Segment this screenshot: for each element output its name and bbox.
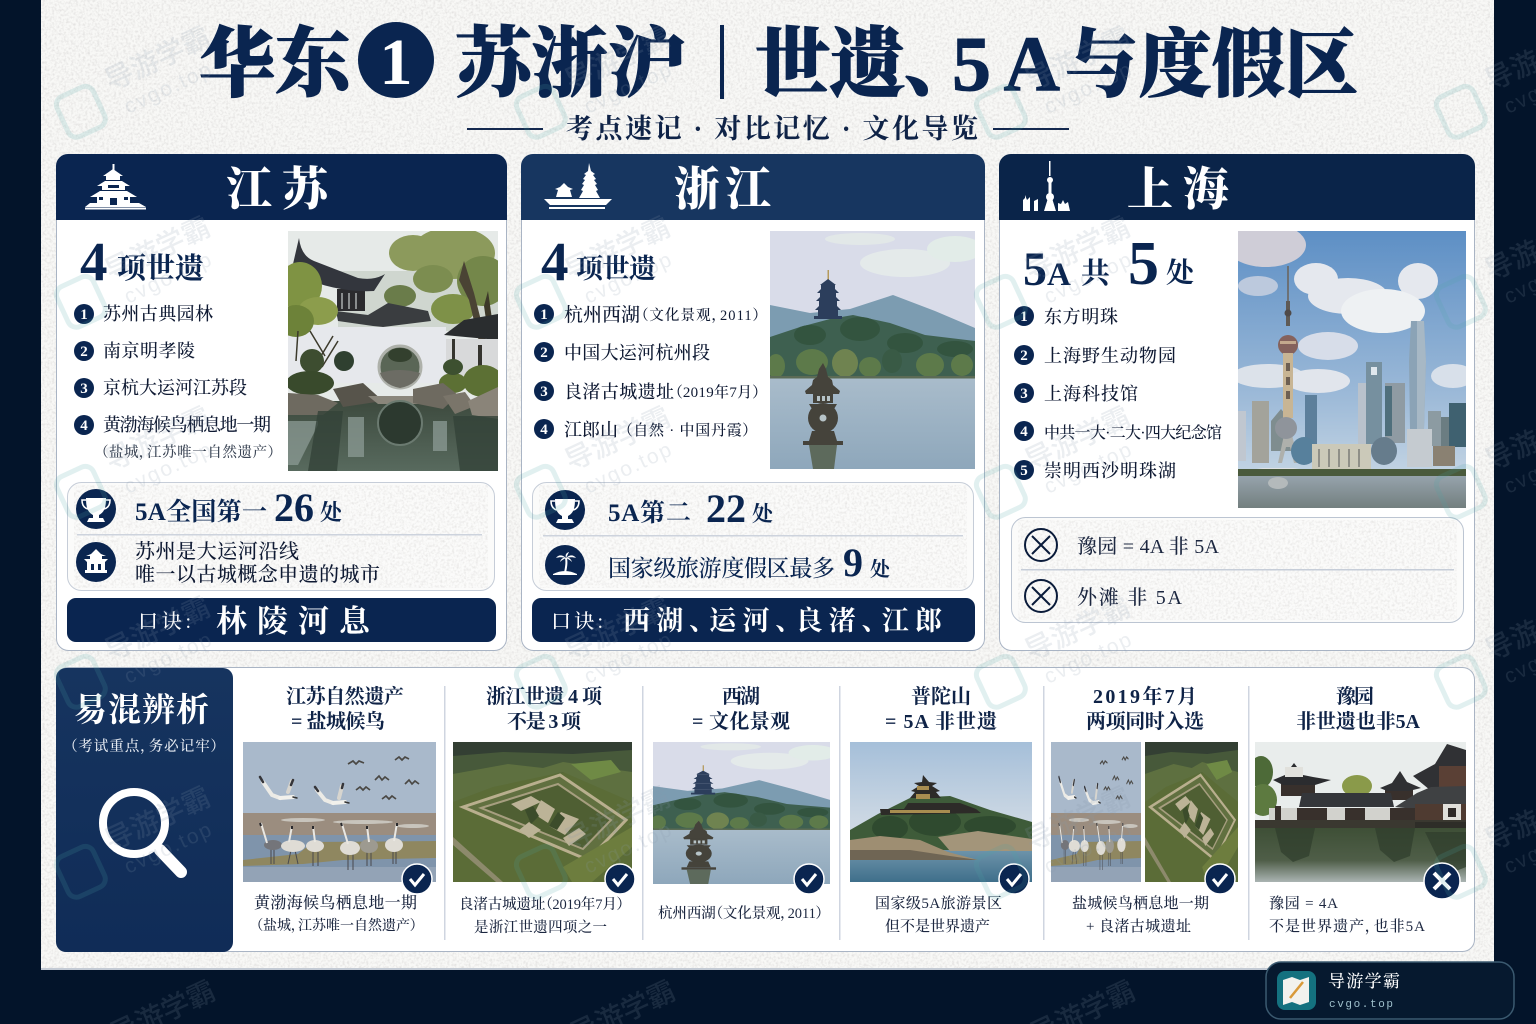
icon: map logo	[1277, 971, 1316, 1010]
text: 豫园: 豫园 = 4A 非 5A	[1077, 535, 1220, 558]
list: 浙江世遗: 江郎山	[564, 420, 618, 440]
list: 江苏世遗: 3	[80, 381, 88, 397]
item: 江苏自然遗产: 黄渤海候鸟栖息地一期	[254, 893, 417, 912]
sidebar	[56, 668, 233, 952]
panel: 上海	[999, 154, 1475, 650]
item: 浙江世遗4项: 是浙江世遗四项之一	[474, 918, 607, 936]
item: 江苏自然遗产: 江苏自然遗产	[286, 684, 404, 708]
count: 5A共5处: 处	[1166, 257, 1196, 289]
list: 上海5A: 5	[1020, 463, 1028, 479]
上海 header bar	[999, 154, 1475, 220]
mnemonic bar: 西湖、运河、良渚、江郎	[623, 606, 942, 636]
list: 浙江世遗: 3	[540, 384, 548, 400]
count: 4项世遗	[80, 231, 204, 292]
item: 2019年7月: + 良渚古城遗址	[1086, 917, 1191, 935]
text: 5A全国第一26处: 5A全国第一	[135, 498, 267, 526]
list: 浙江世遗: （文化景观，2011）	[641, 307, 760, 324]
list: 浙江世遗: （2019年7月）	[675, 383, 760, 401]
list: 江苏世遗: 2	[80, 344, 88, 360]
watermark: 导游学霸	[98, 206, 216, 289]
item: 浙江世遗4项	[453, 685, 635, 936]
text: 苏州运河	[135, 539, 380, 586]
sidebar: 易混辨析	[74, 692, 209, 729]
item: 江苏自然遗产: = 盐城候鸟	[291, 709, 385, 733]
badge: 导游学霸: cvgo.top	[1329, 999, 1393, 1011]
item: 豫园: 豫园 = 4A	[1269, 895, 1338, 912]
watermark: cvgo.top	[1041, 437, 1137, 499]
list: 浙江世遗: 1	[540, 307, 548, 323]
text: 度假区最多9处: 9	[843, 540, 863, 585]
watermark: cvgo.top	[581, 57, 677, 119]
text: 5A第二22处: 处	[752, 502, 774, 526]
panel: 浙江	[521, 154, 985, 650]
icon: pavilion	[85, 164, 146, 210]
badge: 导游学霸: 导游学霸	[1328, 972, 1400, 991]
list: 上海5A: 4	[1020, 424, 1028, 440]
list: 浙江世遗	[534, 304, 760, 440]
text: 度假区最多9处: 国家级旅游度假区最多	[608, 556, 835, 581]
highlights box	[532, 482, 974, 590]
title: 5A	[952, 20, 1060, 107]
text: 苏州运河: 苏州是大运河沿线	[135, 539, 299, 563]
title: 与度假区	[1065, 24, 1358, 107]
watermark: cvgo.top	[1041, 57, 1137, 119]
watermark: 导游学霸	[1018, 396, 1136, 479]
item: 普陀山	[850, 685, 1032, 935]
mnemonic bar: 口诀:	[138, 610, 191, 633]
item: 西湖	[650, 685, 837, 922]
list: 浙江世遗: 2	[540, 345, 548, 361]
watermark: cvgo.top	[121, 247, 217, 309]
item: 浙江世遗4项: 良渚古城遗址（2019年7月）	[459, 895, 624, 913]
icon: pagoda and boat	[544, 163, 612, 209]
item: 西湖: = 文化景观	[692, 710, 790, 733]
badge: 导游学霸	[1266, 962, 1514, 1019]
mnemonic bar: 林陵河息	[216, 604, 372, 639]
count: 4项世遗: 项世遗	[117, 252, 204, 285]
count: 5A共5处: 5	[1128, 230, 1159, 298]
icon: temple	[76, 542, 116, 582]
item: 2019年7月	[1051, 684, 1238, 935]
watermark: 导游学霸	[1018, 776, 1136, 859]
item: 豫园	[1249, 685, 1466, 935]
list: 浙江世遗: 4	[540, 422, 548, 438]
watermark: cvgo.top	[581, 817, 677, 879]
watermark: 导游学霸	[1018, 586, 1136, 669]
watermark: 导游学霸	[98, 776, 216, 859]
watermark: 导游学霸	[1018, 16, 1136, 99]
item: 2019年7月: 两项同时入选	[1086, 710, 1204, 733]
photo: 西湖	[767, 231, 983, 469]
text: 5A全国第一26处: 处	[320, 500, 343, 525]
watermark: 导游学霸	[558, 16, 676, 99]
watermark: 导游学霸	[1018, 206, 1136, 289]
item: 西湖: 西湖	[722, 685, 760, 708]
list: 江苏世遗: 京杭大运河江苏段	[103, 378, 247, 398]
item: 江苏自然遗产: （盐城，江苏唯一自然遗产）	[256, 917, 417, 934]
title	[199, 20, 1358, 107]
icon: magnifier	[103, 792, 181, 872]
count: 4项世遗: 4	[80, 231, 108, 292]
watermark: cvgo.top	[1041, 247, 1137, 309]
text: 5A第二22处: 5A第二	[608, 499, 691, 527]
item: 浙江世遗4项: 浙江世遗 4 项	[486, 685, 603, 708]
list: 上海5A: 中共一大·二大·四大纪念馆	[1044, 423, 1222, 442]
list: 浙江世遗: 中国大运河杭州段	[564, 343, 710, 363]
highlights box	[68, 482, 494, 590]
title: 1	[380, 26, 412, 99]
list: 上海5A: 1	[1020, 309, 1028, 325]
list: 上海5A: 崇明西沙明珠湖	[1044, 461, 1176, 481]
count: 5A共5处: A	[1047, 257, 1071, 293]
item: 豫园: 豫园	[1336, 685, 1374, 708]
list: 江苏世遗: 苏州古典园林	[103, 304, 213, 324]
heading: 江苏: 江苏	[226, 164, 333, 215]
text: 苏州运河: 唯一以古城概念申遗的城市	[135, 563, 380, 586]
mnemonic bar	[532, 598, 975, 642]
list: 江苏世遗	[74, 304, 275, 461]
text: 5A全国第一26处: 26	[274, 485, 314, 530]
count: 5A共5处	[1023, 230, 1196, 298]
item: 2019年7月: 2019年7月	[1093, 684, 1197, 708]
watermark: 导游学霸	[98, 586, 216, 669]
list: 江苏世遗: （盐城，江苏唯一自然遗产）	[101, 443, 275, 461]
list: 江苏世遗: 南京明孝陵	[103, 340, 195, 361]
watermark: 导游学霸	[558, 586, 676, 669]
item: 2019年7月: 盐城候鸟栖息地一期	[1072, 894, 1209, 912]
panel: 易混辨析	[56, 668, 1474, 952]
sidebar: （考试重点，务必记牢）	[70, 737, 218, 755]
photo: 苏州园林	[288, 231, 498, 471]
浙江 header bar	[521, 154, 985, 220]
icon: cross	[1025, 580, 1057, 612]
watermark: cvgo.top	[581, 247, 677, 309]
count: 4项世遗: 4	[541, 231, 568, 292]
list: 上海5A: 东方明珠	[1044, 307, 1118, 327]
title: 、	[905, 23, 943, 107]
title: 苏浙沪	[455, 23, 685, 107]
item: 普陀山: 国家级5A旅游景区	[875, 895, 1002, 912]
list: 江苏世遗: 4	[80, 418, 88, 434]
list: 浙江世遗: 良渚古城遗址	[564, 382, 674, 402]
count: 4项世遗: 项世遗	[576, 254, 656, 284]
list: 上海5A: 2	[1020, 348, 1028, 364]
list: 上海5A: 上海野生动物园	[1044, 346, 1176, 366]
icon: palm island	[545, 545, 585, 585]
江苏 header bar	[56, 154, 507, 220]
icon: trophy	[76, 489, 116, 529]
count: 4项世遗	[541, 231, 656, 292]
list: 浙江世遗: （自然 · 中国丹霞）	[625, 421, 750, 439]
list: 浙江世遗: 杭州西湖	[564, 304, 640, 326]
icon: skyline	[1023, 161, 1070, 211]
icon: cross	[1025, 529, 1057, 561]
watermark: 导游学霸	[558, 776, 676, 859]
photo: 上海天际线	[1238, 231, 1466, 508]
item: 普陀山: 普陀山	[911, 685, 971, 708]
watermark: 导游学霸	[98, 396, 216, 479]
watermark: cvgo.top	[121, 437, 217, 499]
text: 度假区最多9处: 处	[870, 558, 891, 581]
panel: 江苏	[56, 154, 509, 650]
text: 5A第二22处: 22	[706, 486, 746, 531]
text: 5A全国第一26处	[135, 485, 343, 530]
watermark: cvgo.top	[121, 627, 217, 689]
item: 西湖: 杭州西湖（文化景观，2011）	[658, 904, 823, 922]
title: 华东	[199, 23, 358, 107]
list: 江苏世遗: 1	[80, 307, 88, 323]
watermark: cvgo.top	[1041, 817, 1137, 879]
item: 豫园: 非世遗也非5A	[1296, 710, 1421, 733]
title: 世遗	[755, 23, 905, 107]
item: 普陀山: = 5A 非世遗	[885, 710, 997, 733]
watermark: cvgo.top	[121, 57, 217, 119]
watermark: 导游学霸	[558, 206, 676, 289]
subtitle: 考点速记 · 对比记忆 · 文化导览	[566, 113, 978, 144]
warnings box	[1012, 518, 1464, 622]
watermark: 导游学霸	[558, 396, 676, 479]
list: 上海5A: 上海科技馆	[1044, 384, 1138, 404]
watermark: 导游学霸	[98, 16, 216, 99]
watermark: cvgo.top	[581, 627, 677, 689]
list: 江苏世遗: 黄渤海候鸟栖息地一期	[103, 415, 271, 435]
text: 度假区最多9处	[608, 540, 891, 585]
mnemonic bar: 口诀:	[551, 610, 603, 633]
text: 外滩: 外滩 非 5A	[1077, 586, 1183, 609]
item: 浙江世遗4项: 不是 3 项	[507, 710, 582, 733]
item: 普陀山: 但不是世界遗产	[885, 917, 990, 935]
list: 上海5A	[1014, 306, 1222, 481]
heading: 浙江: 浙江	[674, 164, 771, 215]
icon: trophy	[545, 490, 585, 530]
item: 江苏自然遗产	[243, 684, 436, 934]
list: 上海5A: 3	[1020, 386, 1028, 402]
watermark: cvgo.top	[1041, 627, 1137, 689]
item: 豫园: 不是世界遗产，也非5A	[1269, 917, 1425, 935]
heading: 上海: 上海	[1127, 164, 1229, 215]
count: 5A共5处: 5	[1023, 243, 1047, 296]
count: 5A共5处: 共	[1081, 257, 1111, 290]
watermark: cvgo.top	[121, 817, 217, 879]
watermark: cvgo.top	[581, 437, 677, 499]
mnemonic bar	[67, 598, 496, 642]
text: 5A第二22处	[608, 486, 774, 531]
